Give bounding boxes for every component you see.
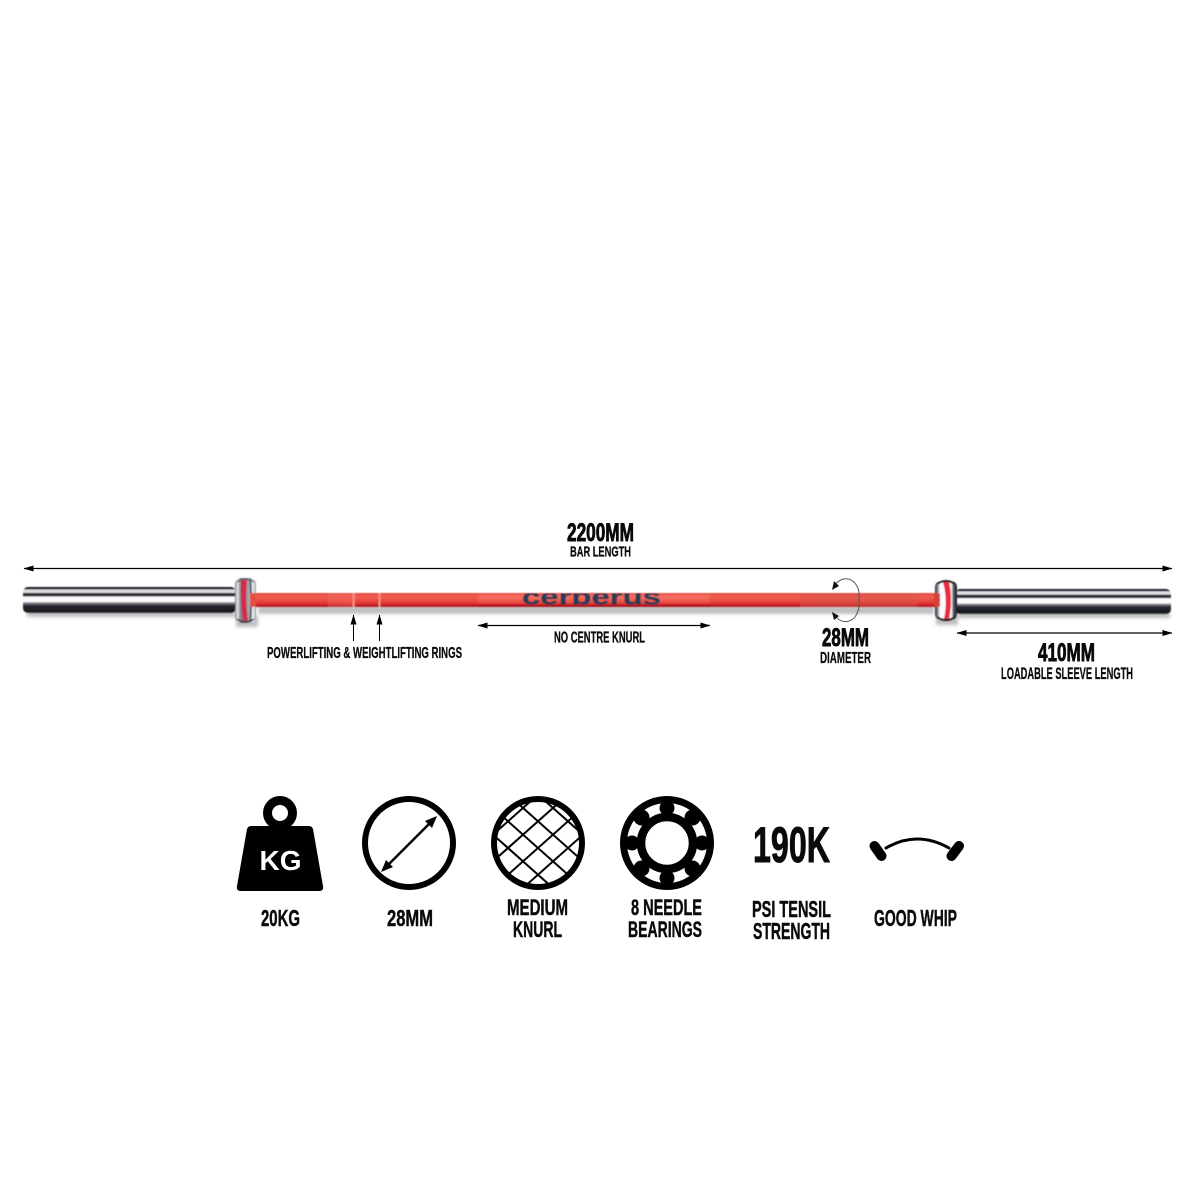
- spec: diameter: 28MM: [387, 905, 433, 931]
- sleeve length label: [1001, 639, 1133, 683]
- bar length label: [567, 519, 634, 560]
- spec: weight: 20KG: [261, 905, 300, 931]
- spec: knurl: [491, 796, 585, 938]
- arrow: no centre knurl: [478, 624, 710, 626]
- arrow: weightlifting ring: [378, 615, 380, 641]
- spec: diameter: [365, 799, 453, 931]
- barbell shadow: [27, 606, 1170, 627]
- arrow: sleeve length: [957, 632, 1172, 634]
- no centre knurl label: NO CENTRE KNURL: [554, 630, 645, 646]
- diameter label: DIAMETER: [820, 650, 871, 667]
- arrow: powerlifting ring: [352, 615, 354, 641]
- left sleeve: [23, 587, 236, 613]
- spec: tensile strength: PSI TENSIL: [752, 896, 831, 922]
- right collar: [934, 581, 957, 620]
- brand logo on shaft: cerberus: [522, 584, 661, 610]
- rings label: POWERLIFTING & WEIGHTLIFTING RINGS: [267, 645, 462, 662]
- bar length label: 2200MM: [567, 519, 634, 547]
- spec: knurl: KNURL: [513, 917, 562, 942]
- spec: weight: [237, 800, 323, 931]
- icon: needle bearing: [624, 800, 710, 886]
- spec: bearings: [624, 800, 710, 942]
- spec: whip: [874, 839, 959, 931]
- shaft: [250, 593, 940, 607]
- spec: whip: GOOD WHIP: [874, 905, 957, 931]
- spec: bearings: 8 NEEDLE: [631, 895, 702, 920]
- sleeve length label: 410MM: [1038, 639, 1095, 667]
- spec: knurl: MEDIUM: [507, 895, 568, 920]
- spec: tensile strength: 190K: [753, 817, 830, 873]
- diameter label: 28MM: [822, 624, 869, 652]
- barbell: [23, 578, 1171, 627]
- icon: knurl crosshatch: [491, 796, 585, 890]
- icon: bending bar: [874, 839, 959, 856]
- icon: rotation arrow around shaft: [832, 579, 859, 622]
- diameter label: [820, 624, 871, 667]
- spec: tensile strength: [752, 817, 831, 944]
- left collar: [235, 578, 256, 623]
- bar length label: BAR LENGTH: [570, 544, 631, 560]
- icon: circle with diameter arrow: [365, 799, 453, 887]
- icon: kettle weight: KG: [260, 845, 302, 876]
- right sleeve: [955, 589, 1171, 614]
- spec: bearings: BEARINGS: [628, 917, 702, 942]
- spec: tensile strength: STRENGTH: [753, 918, 830, 944]
- arrow: bar length: [24, 568, 1172, 570]
